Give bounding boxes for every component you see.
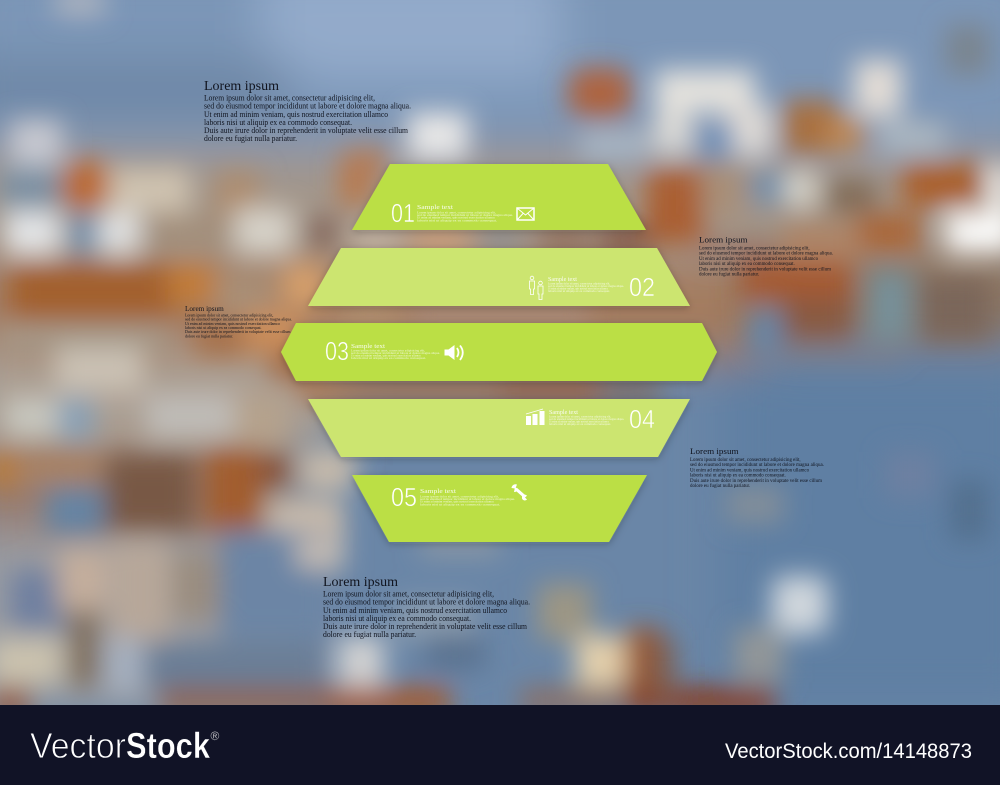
text block: left middle (185, 305, 292, 338)
sample text 02: laboris nisi ut aliquip ex ea commodo consequat. (548, 289, 610, 293)
sample text 01: Lorem ipsum dolor sit amet, consectetur adipisicing elit, (417, 210, 496, 215)
icon: wrench (512, 484, 527, 500)
text block: bottom: dolore eu fugiat nulla pariatur. (323, 629, 416, 639)
panel: 05 (352, 475, 647, 542)
text block: right lower: Ut enim ad minim veniam, quis nostrud exercitation ullamco (690, 467, 809, 473)
sample text 03: laboris nisi ut aliquip ex ea commodo consequat. (351, 356, 426, 360)
icon: rising bars (526, 409, 544, 425)
logo: VectorStock: Stock (126, 725, 211, 766)
text block: right lower: laboris nisi ut aliquip ex ea commodo consequat. (690, 473, 786, 479)
text block: left middle: laboris nisi ut aliquip ex ea commodo consequat. (185, 325, 262, 330)
text block: top left: Ut enim ad minim veniam, quis nostrud exercitation ullamco (204, 109, 388, 119)
icon: envelope (517, 208, 534, 220)
footer bar (0, 705, 1000, 785)
text block: left middle: Duis aute irure dolor in reprehenderit in voluptate velit esse cillum (185, 329, 291, 334)
text block: right upper: laboris nisi ut aliquip ex ea commodo consequat. (699, 261, 795, 267)
sample text 03: sed do eiusmod tempor incididunt ut labore et dolore magna aliqua. (351, 351, 440, 355)
text block: top left: laboris nisi ut aliquip ex ea commodo consequat. (204, 117, 352, 127)
sample text 05: Ut enim ad minim veniam, quis nostrud exercitation ullamco (420, 500, 494, 505)
sample text 05 (420, 488, 515, 506)
sample text 05: Lorem ipsum dolor sit amet, consectetur adipisicing elit, (420, 494, 499, 499)
icon: speaker (444, 345, 463, 360)
text block: right upper (699, 234, 833, 278)
sample text 01: laboris nisi ut aliquip ex ea commodo consequat. (417, 218, 497, 222)
panel: 02 (308, 248, 690, 306)
sample text 02: Lorem ipsum dolor sit amet, consectetur adipisicing elit, (548, 282, 610, 286)
text block: bottom (323, 574, 530, 639)
text block: bottom: Lorem ipsum (323, 574, 399, 589)
sample text 03: Sample text (351, 343, 385, 350)
sample text 05: laboris nisi ut aliquip ex ea commodo consequat. (420, 502, 500, 506)
sample text 01: sed do eiusmod tempor incididunt ut labore et dolore magna aliqua. (417, 213, 513, 217)
sample text 02 (548, 276, 624, 293)
sample text 04: sed do eiusmod tempor incididunt ut labore et dolore magna aliqua. (549, 417, 624, 421)
sample text 03 (351, 343, 440, 360)
number 02: 02 (629, 272, 655, 302)
text block: left middle: Ut enim ad minim veniam, quis nostrud exercitation ullamco (185, 321, 281, 327)
text block: right upper: dolore eu fugiat nulla pariatur. (699, 271, 760, 278)
number 03: 03 (325, 336, 349, 366)
text block: right upper: Lorem ipsum dolor sit amet, consectetur adipisicing elit, (699, 245, 810, 251)
text block: bottom: laboris nisi ut aliquip ex ea commodo consequat. (323, 613, 471, 623)
text block: top left: Lorem ipsum (204, 78, 280, 93)
logo: VectorStock (30, 725, 220, 766)
text block: left middle: Lorem ipsum dolor sit amet, consectetur adipisicing elit, (185, 312, 273, 318)
panel: 01 (352, 164, 646, 230)
sample text 01 (417, 204, 513, 222)
sample text 04: Lorem ipsum dolor sit amet, consectetur adipisicing elit, (549, 414, 611, 420)
text block: top left: sed do eiusmod tempor incididunt ut labore et dolore magna aliqua. (204, 101, 411, 111)
text block: bottom: Lorem ipsum dolor sit amet, consectetur adipisicing elit, (323, 588, 494, 598)
text block: right lower: sed do eiusmod tempor incididunt ut labore et dolore magna aliqua. (690, 462, 824, 468)
text block: left middle: Lorem ipsum (185, 305, 224, 313)
text block: right upper: sed do eiusmod tempor incididunt ut labore et dolore magna aliqua. (699, 251, 833, 257)
panel: 03 (281, 323, 717, 381)
text block: bottom: Duis aute irure dolor in reprehenderit in voluptate velit esse cillum (323, 621, 527, 631)
number 05: 05 (391, 482, 417, 512)
panel: 04 (308, 399, 690, 457)
text block: top left (204, 78, 411, 143)
text block: top left: dolore eu fugiat nulla pariatur. (204, 133, 297, 143)
sample text 02: Sample text (548, 276, 577, 283)
text block: right lower: Lorem ipsum dolor sit amet, consectetur adipisicing elit, (690, 457, 801, 463)
sample text 05: Sample text (420, 488, 456, 495)
sample text 04: Sample text (549, 409, 578, 416)
sample text 01: Sample text (417, 204, 453, 211)
sample text 05: sed do eiusmod tempor incididunt ut labore et dolore magna aliqua. (420, 497, 515, 501)
sample text 02: sed do eiusmod tempor incididunt ut labore et dolore magna aliqua. (548, 284, 624, 288)
sample text 03: Ut enim ad minim veniam, quis nostrud exercitation ullamco (351, 354, 421, 358)
text block: bottom: Ut enim ad minim veniam, quis nostrud exercitation ullamco (323, 605, 507, 615)
icon: two people (530, 276, 543, 300)
text block: top left: Lorem ipsum dolor sit amet, consectetur adipisicing elit, (204, 92, 375, 102)
number 01: 01 (391, 198, 415, 228)
sample text 04: laboris nisi ut aliquip ex ea commodo consequat. (549, 422, 611, 426)
text block: right upper: Lorem ipsum (699, 234, 748, 245)
logo: VectorStock: Vector (30, 725, 126, 766)
text block: left middle: dolore eu fugiat nulla pariatur. (185, 333, 233, 338)
text block: right lower: dolore eu fugiat nulla pariatur. (690, 482, 751, 489)
sample text 04 (549, 409, 624, 426)
text block: right upper: Duis aute irure dolor in reprehenderit in voluptate velit esse cillum (699, 266, 832, 272)
text block: right lower: Duis aute irure dolor in reprehenderit in voluptate velit esse cillum (690, 478, 823, 484)
text block: bottom: sed do eiusmod tempor incididunt ut labore et dolore magna aliqua. (323, 597, 530, 607)
text block: right lower: Lorem ipsum (690, 446, 739, 456)
text block: left middle: sed do eiusmod tempor incididunt ut labore et dolore magna aliqua. (185, 317, 292, 322)
image id: VectorStock.com/14148873 (725, 740, 972, 763)
sample text 04: Ut enim ad minim veniam, quis nostrud exercitation ullamco (549, 420, 609, 424)
text block: top left: Duis aute irure dolor in reprehenderit in voluptate velit esse cillum (204, 125, 408, 135)
sample text 03: Lorem ipsum dolor sit amet, consectetur adipisicing elit, (351, 348, 425, 354)
text block: right lower (690, 446, 824, 489)
logo: VectorStock: ® (210, 729, 220, 743)
sample text 02: Ut enim ad minim veniam, quis nostrud exercitation ullamco (548, 286, 608, 292)
sample text 01: Ut enim ad minim veniam, quis nostrud exercitation ullamco (417, 216, 495, 221)
number 04: 04 (629, 404, 655, 434)
text block: right upper: Ut enim ad minim veniam, quis nostrud exercitation ullamco (699, 256, 818, 262)
